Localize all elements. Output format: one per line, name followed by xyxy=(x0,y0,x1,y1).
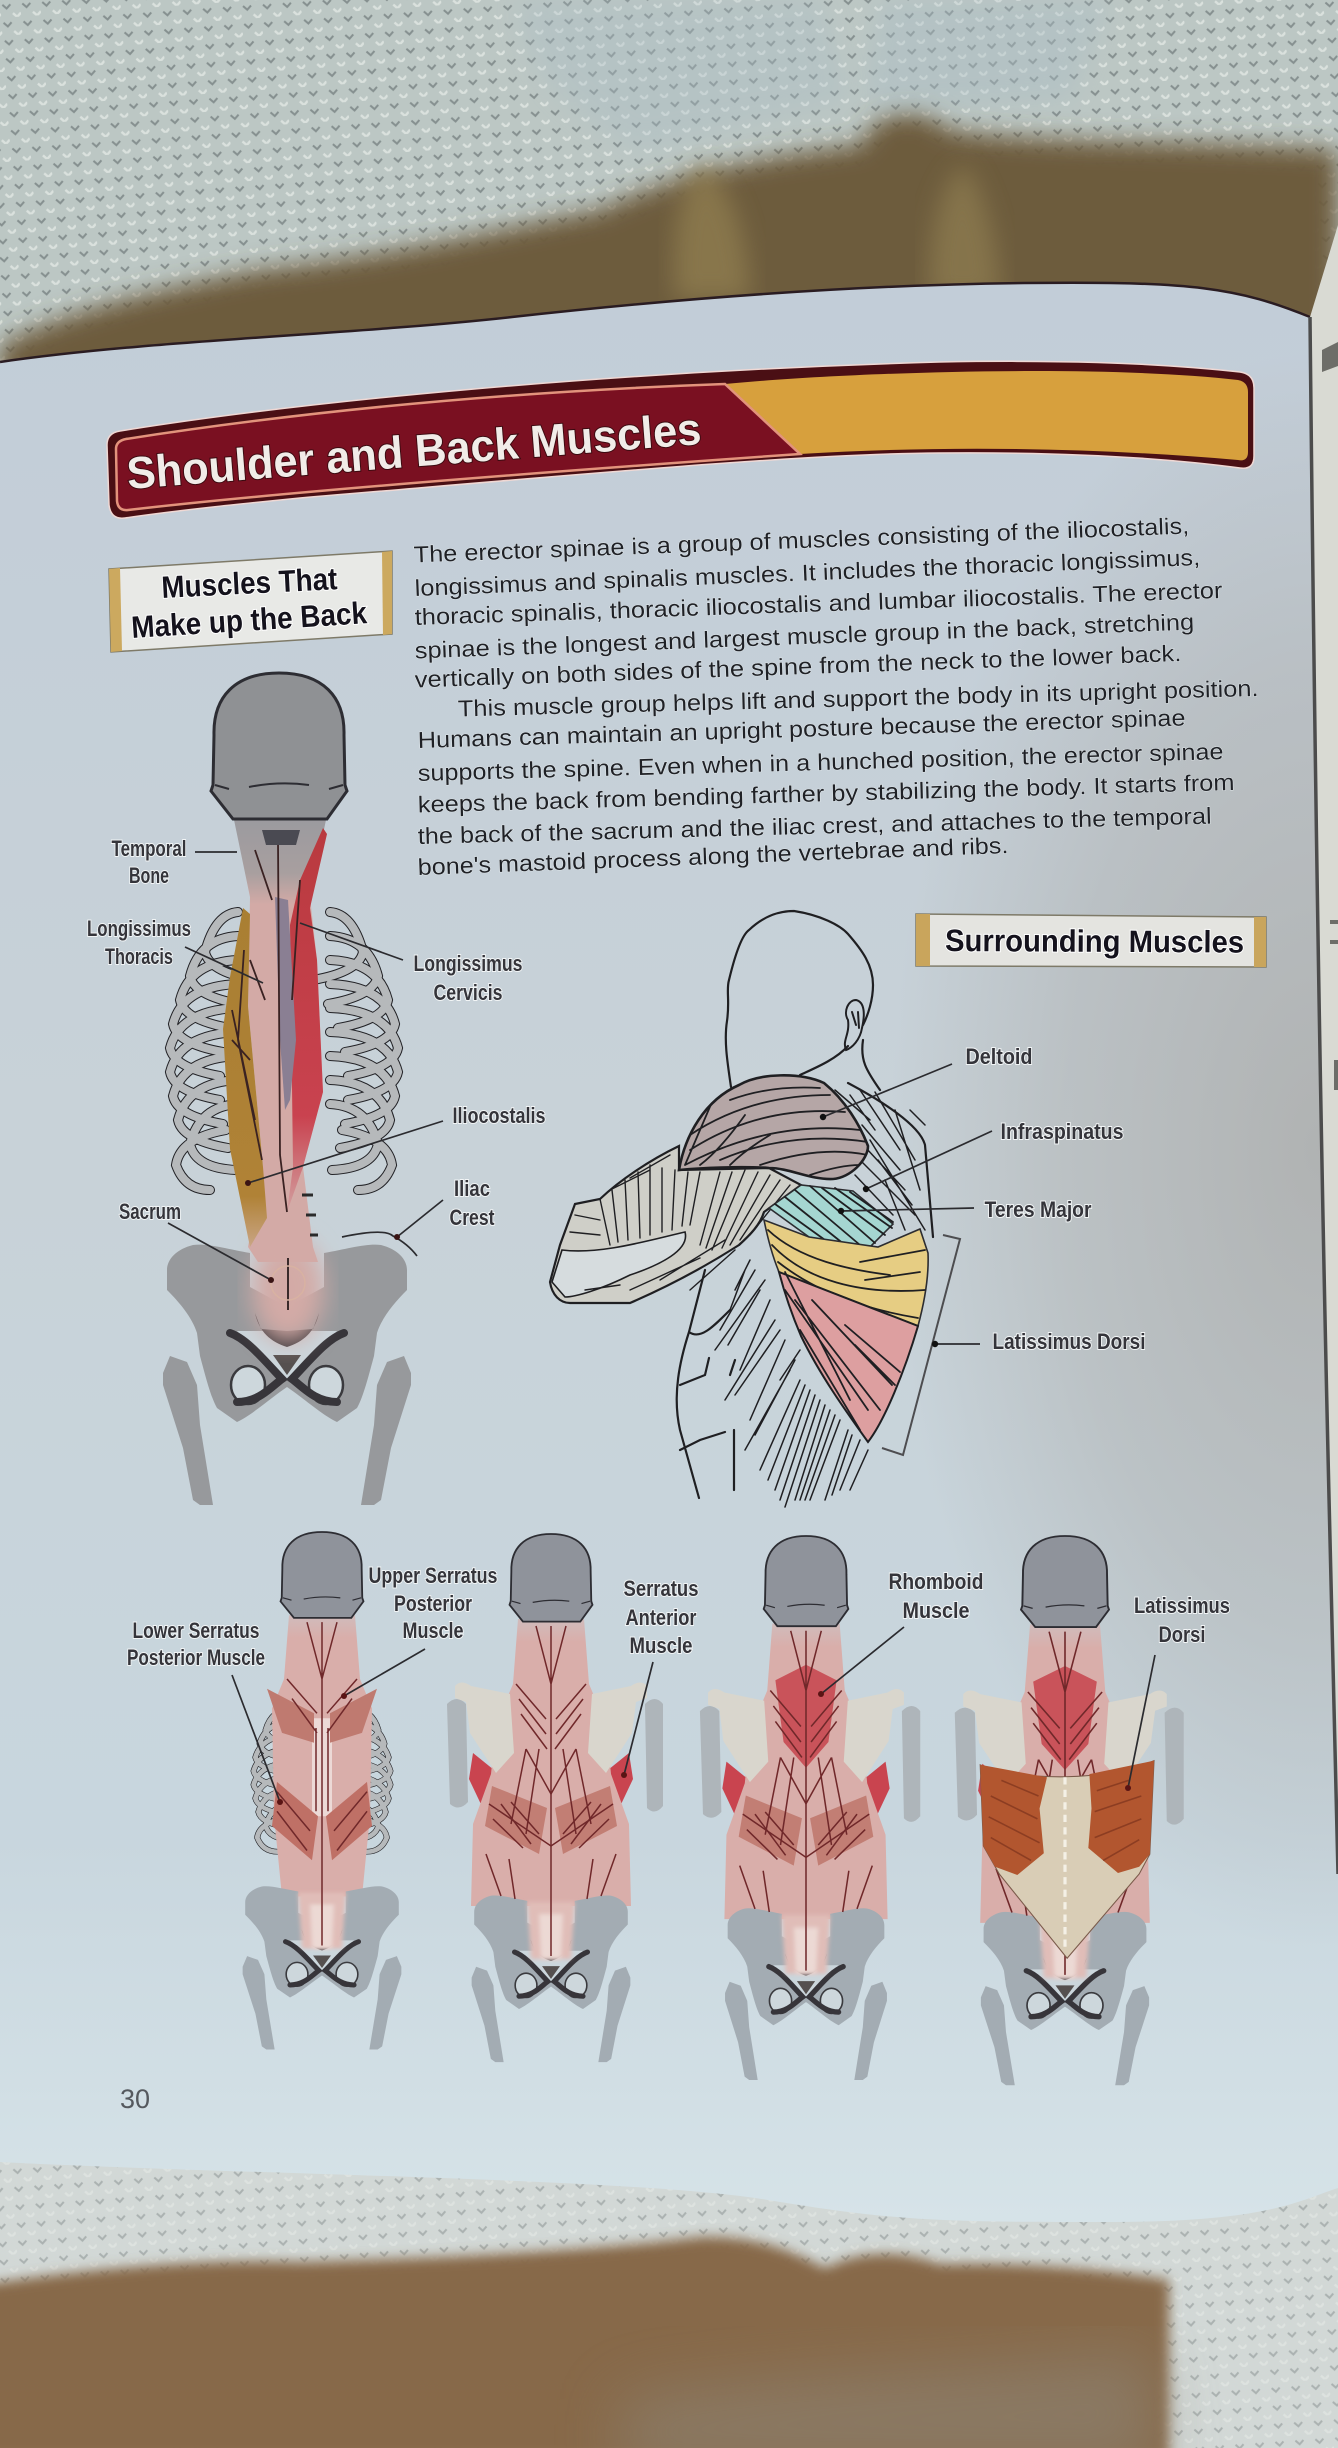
body text xyxy=(413,513,1259,880)
body text: supports the spine. Even when in a hunched position, the erector spinae xyxy=(417,738,1224,786)
heading: Muscles That Make up the Back: Muscles That xyxy=(161,561,338,605)
label: Teres Major xyxy=(838,1197,1092,1222)
figure: erector spinae skeleton xyxy=(87,673,546,1505)
label: Iliac Crest: Iliac xyxy=(454,1176,490,1201)
label: Upper Serratus Posterior Muscle: Upper Serratus xyxy=(368,1563,498,1588)
label: Teres Major: Teres Major xyxy=(984,1197,1092,1222)
label: Serratus Anterior Muscle: Anterior xyxy=(626,1605,697,1630)
body text: longissimus and spinalis muscles. It includes the thoracic longissimus, xyxy=(414,544,1201,601)
body text: the back of the sacrum and the iliac crest, and attaches to the temporal xyxy=(417,803,1212,849)
label: Longissimus Thoracis: Thoracis xyxy=(105,944,173,969)
label: Sacrum xyxy=(119,1199,274,1283)
body text: vertically on both sides of the spine from the neck to the lower back. xyxy=(414,640,1182,692)
body text: Humans can maintain an upright posture because the erector spinae xyxy=(417,704,1186,753)
label: Rhomboid Muscle xyxy=(818,1569,984,1697)
label: Longissimus Cervicis: Cervicis xyxy=(434,980,502,1005)
latissimus lower band xyxy=(779,1272,918,1442)
label: Iliac Crest xyxy=(342,1176,495,1256)
deltoid muscle xyxy=(679,1075,868,1179)
label: Temporal Bone: Temporal xyxy=(112,836,186,861)
body text: keeps the back from bending farther by stabilizing the body. It starts from xyxy=(417,769,1235,817)
label: Temporal Bone xyxy=(112,836,237,888)
body text: spinae is the longest and largest muscle group in the back, stretching xyxy=(414,609,1195,663)
label: Upper Serratus Posterior Muscle: Posterior xyxy=(394,1591,472,1616)
label: Longissimus Thoracis xyxy=(87,916,263,983)
page number: 30 xyxy=(120,2084,150,2114)
label: Iliocostalis: Iliocostalis xyxy=(452,1103,546,1128)
book page xyxy=(0,283,1338,2222)
title text: Shoulder and Back Muscles xyxy=(125,403,703,499)
label: Upper Serratus Posterior Muscle xyxy=(341,1563,498,1699)
figure: serratus anterior skeleton xyxy=(447,1534,663,2062)
label: Rhomboid Muscle: Rhomboid xyxy=(888,1569,984,1594)
latissimus upper band xyxy=(764,1220,928,1326)
label: Longissimus Cervicis: Longissimus xyxy=(414,951,522,976)
label: Infraspinatus xyxy=(863,1119,1124,1192)
label: Rhomboid Muscle: Muscle xyxy=(902,1598,970,1623)
label: Serratus Anterior Muscle xyxy=(621,1576,698,1778)
body text: The erector spinae is a group of muscles consisting of the iliocostalis, xyxy=(413,513,1190,567)
label: Serratus Anterior Muscle: Muscle xyxy=(630,1633,692,1658)
facing page edge xyxy=(1310,225,1338,1874)
heading: Muscles That Make up the Back: Make up the Back xyxy=(130,595,369,645)
icon: skull xyxy=(211,673,347,819)
label: Latissimus Dorsi lower: Dorsi xyxy=(1158,1622,1206,1647)
label: Lower Serratus Posterior Muscle xyxy=(127,1618,283,1805)
label: Infraspinatus: Infraspinatus xyxy=(1000,1119,1124,1144)
heading: Surrounding Muscles: Surrounding Muscles xyxy=(945,923,1244,960)
label: Deltoid xyxy=(820,1044,1032,1120)
body contour and back lines xyxy=(677,1083,933,1507)
bracket xyxy=(882,1235,960,1455)
figure: shoulder and back muscle drawing xyxy=(550,911,1146,1507)
icon: rib cage xyxy=(170,912,398,1190)
figure: rhomboid skeleton xyxy=(700,1536,920,2080)
icon: pelvis and femurs xyxy=(163,1245,411,1505)
label: Latissimus Dorsi lower xyxy=(1125,1593,1230,1791)
label: Longissimus Thoracis: Longissimus xyxy=(87,916,191,941)
label: Longissimus Cervicis xyxy=(300,923,522,1005)
body text: bone's mastoid process along the vertebrae and ribs. xyxy=(417,832,1009,880)
body text: thoracic spinalis, thoracic iliocostalis and lumbar iliocostalis. The erector xyxy=(414,577,1223,630)
teres major muscle xyxy=(769,1185,893,1249)
label: Sacrum: Sacrum xyxy=(119,1199,181,1224)
title banner xyxy=(107,361,1254,518)
heading: Muscles That Make up the Back xyxy=(109,551,392,652)
label: Iliac Crest: Crest xyxy=(450,1205,495,1230)
figure: serratus posterior skeleton xyxy=(243,1532,401,2050)
figure: latissimus dorsi skeleton xyxy=(955,1536,1184,2085)
label: Latissimus Dorsi lower: Latissimus xyxy=(1134,1593,1230,1618)
label: Lower Serratus Posterior Muscle: Lower Serratus xyxy=(132,1618,260,1643)
label: Iliocostalis xyxy=(245,1103,546,1186)
head outline xyxy=(726,911,880,1090)
label: Temporal Bone: Bone xyxy=(129,863,169,888)
body text: This muscle group helps lift and support the body in its upright position. xyxy=(457,675,1259,721)
label: Latissimus Dorsi: Latissimus Dorsi xyxy=(992,1329,1146,1354)
label: Upper Serratus Posterior Muscle: Muscle xyxy=(402,1618,464,1643)
label: Latissimus Dorsi xyxy=(932,1329,1146,1354)
heading: Surrounding Muscles xyxy=(916,914,1266,967)
label: Lower Serratus Posterior Muscle: Posterior Muscle xyxy=(127,1645,265,1670)
label: Deltoid: Deltoid xyxy=(966,1044,1032,1069)
label: Serratus Anterior Muscle: Serratus xyxy=(624,1576,698,1601)
erector spinae muscles xyxy=(223,815,327,1342)
upper arm xyxy=(550,1146,801,1303)
